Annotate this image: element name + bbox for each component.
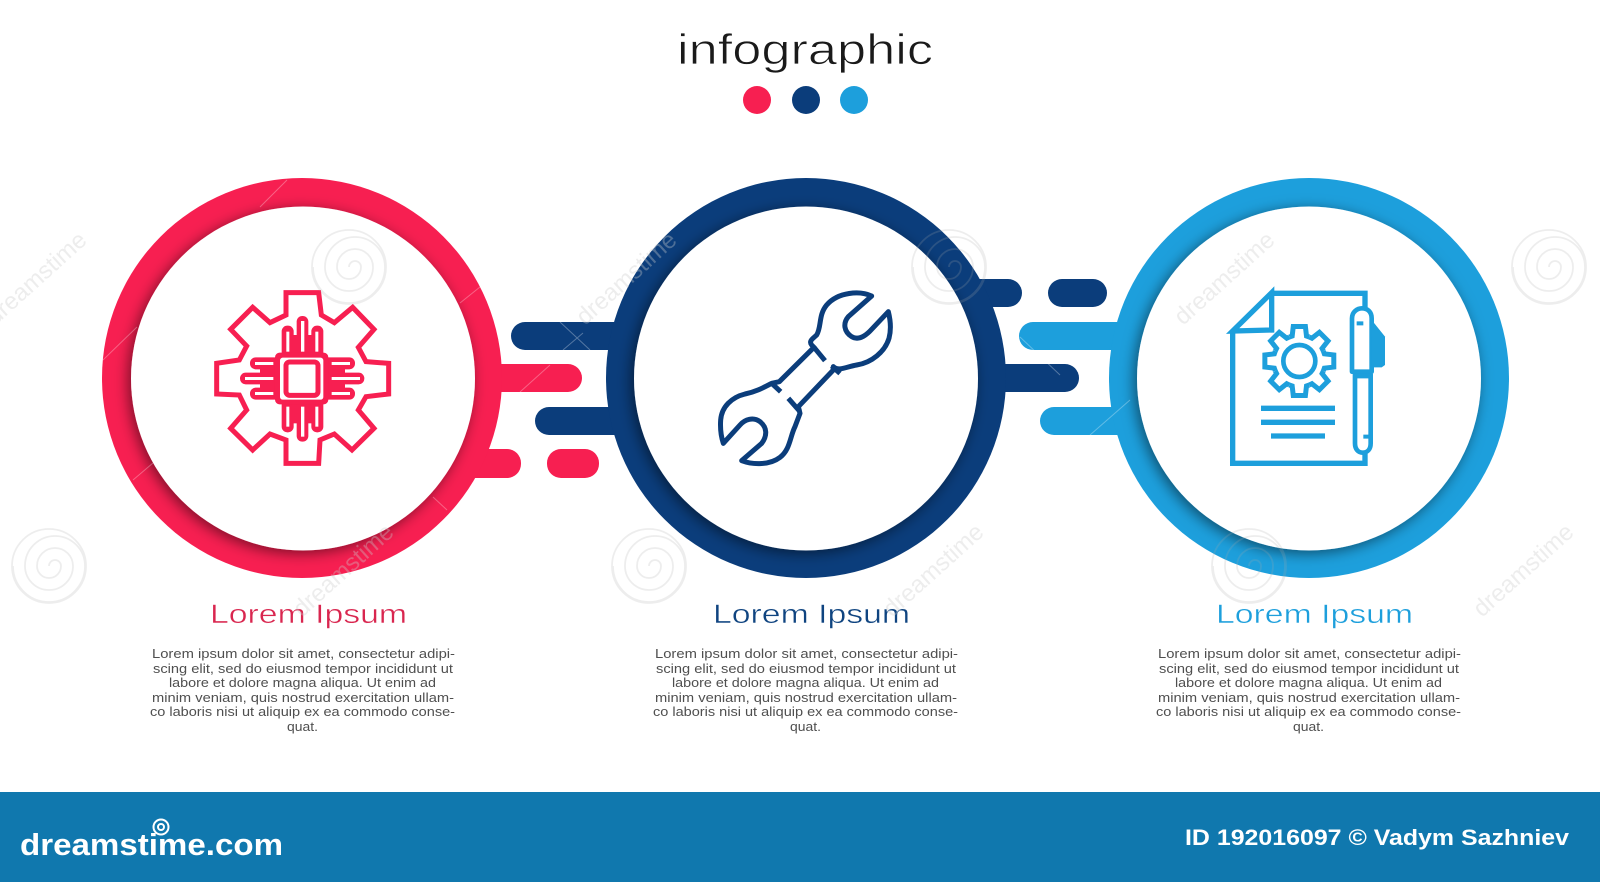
watermark pattern: dreamstime [1169, 227, 1280, 330]
legend dots [743, 86, 868, 114]
title: infographic [677, 26, 933, 74]
watermark pattern [0, 180, 1586, 622]
panel: step 1 circle [102, 178, 502, 578]
icon: wrench [721, 293, 890, 464]
icon: document with gear and pen [1233, 293, 1385, 463]
text block: step 2 [653, 647, 958, 734]
panel: step 3 circle [1109, 178, 1509, 578]
footer banner [0, 792, 1600, 882]
connector bars: red and navy [440, 322, 641, 478]
heading: step 1: Lorem Ipsum [210, 599, 407, 629]
watermark pattern: dreamstime [878, 519, 989, 622]
panel: step 2 circle [606, 178, 1006, 578]
text block: step 3 [1156, 647, 1461, 734]
watermark pattern: dreamstime [571, 227, 682, 330]
heading: step 2: Lorem Ipsum [713, 599, 910, 629]
icon: gear with chip [217, 293, 389, 463]
heading: step 3: Lorem Ipsum [1216, 599, 1413, 629]
watermark pattern: dreamstime [1468, 519, 1579, 622]
logo wordmark: dreamstime.com [20, 827, 283, 862]
watermark pattern: dreamstime [288, 519, 399, 622]
connector bars: navy and blue [950, 279, 1149, 435]
image credit: ID 192016097 © Vadym Sazhniev [1185, 825, 1570, 850]
text block: step 1 [150, 647, 455, 734]
